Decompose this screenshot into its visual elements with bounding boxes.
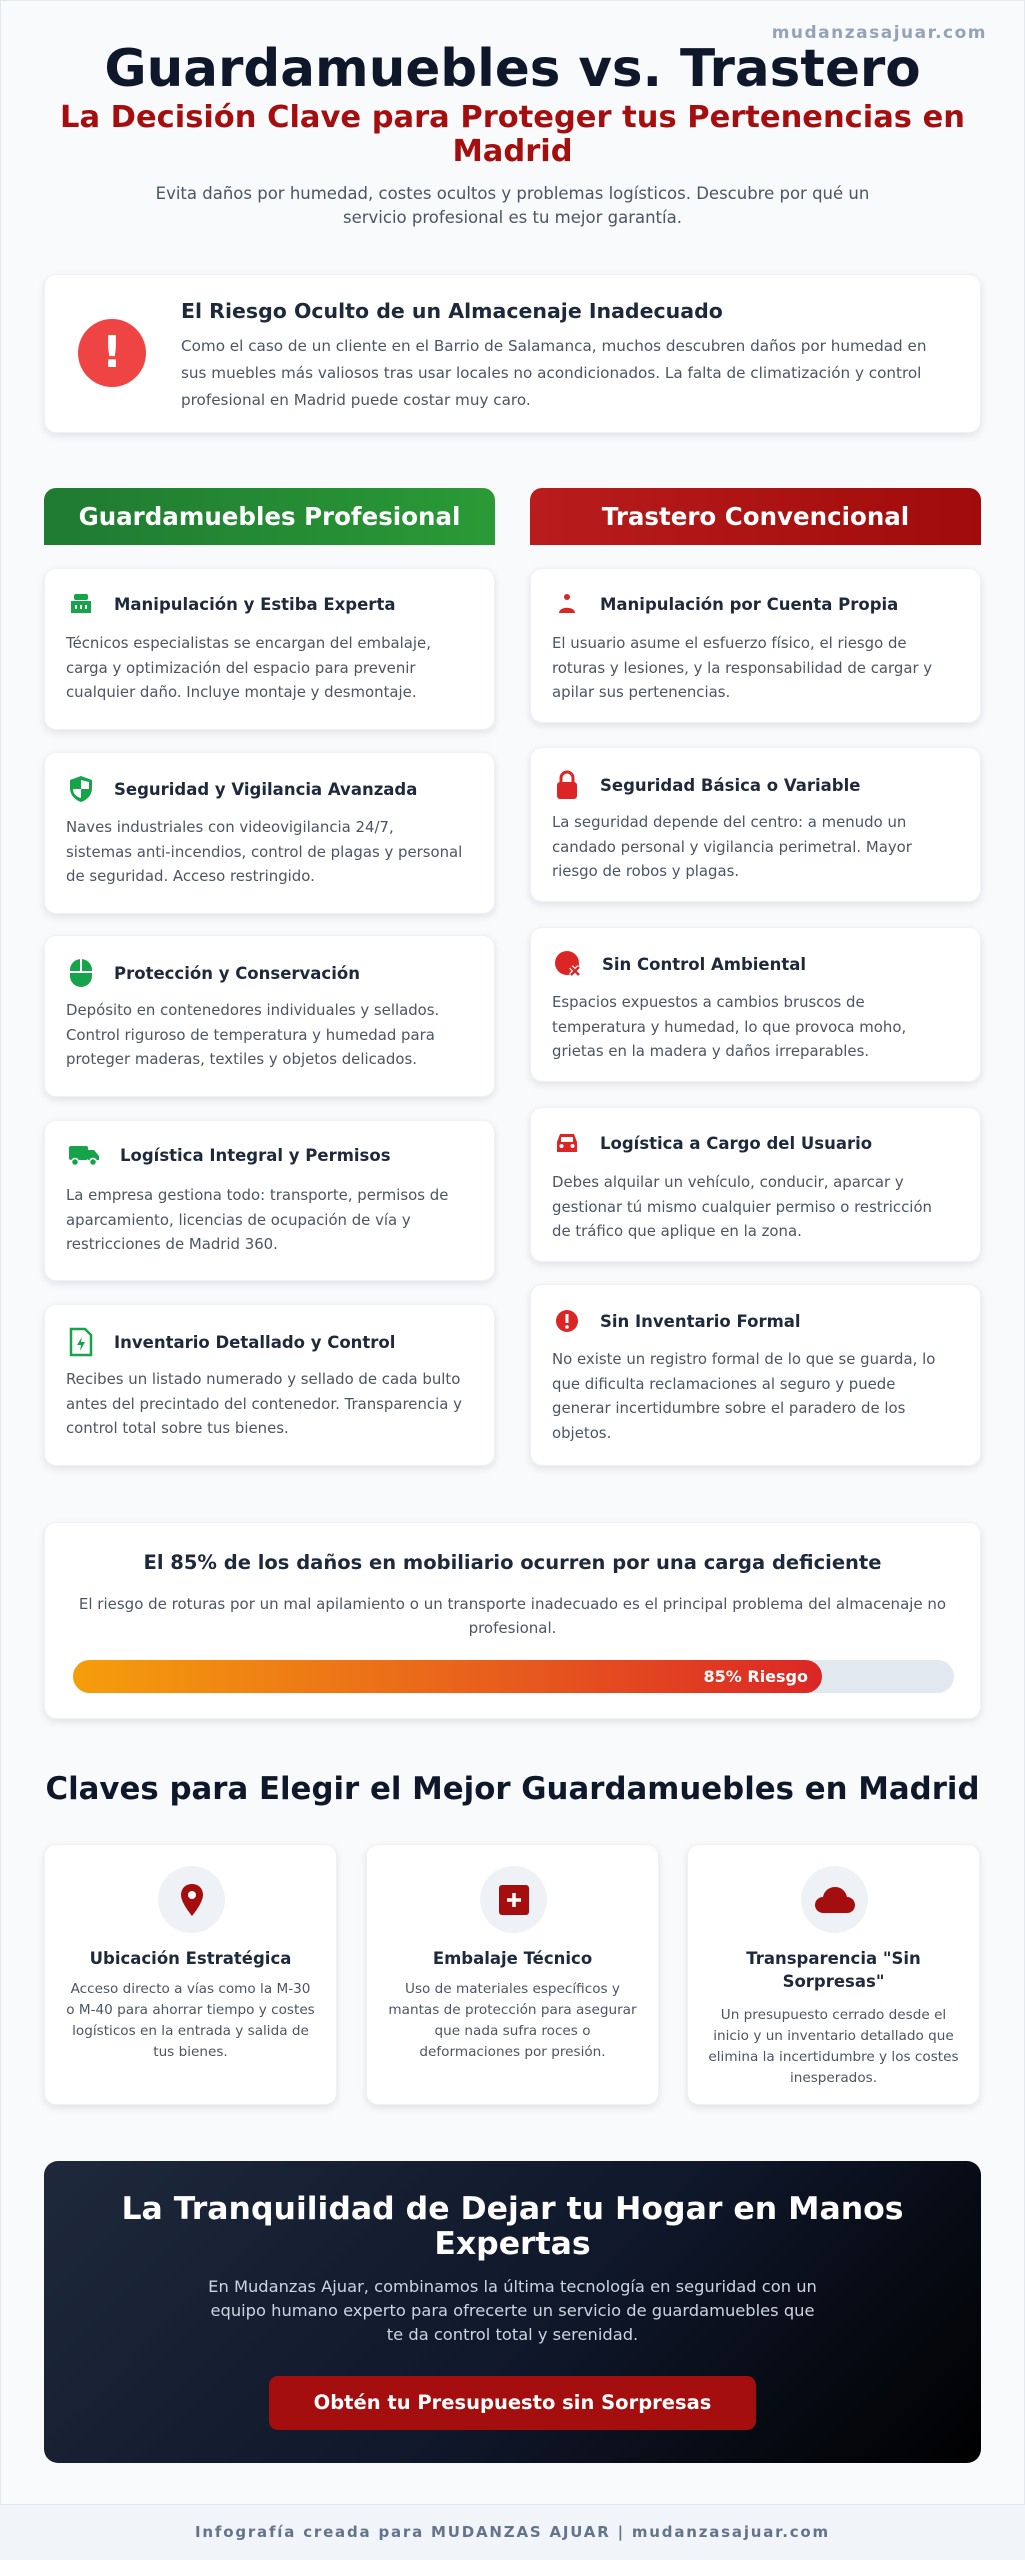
card: sin inventario: No existe un registro formal de lo que se guarda, lo que dificulta reclamaciones al seguro y puede generar incertidumbre sobre el paradero de los objetos. [552,1350,935,1442]
subtitle: La Decisión Clave para Proteger tus Pertenencias en Madrid [60,100,965,169]
card: logística usuario: Logística a Cargo del Usuario [600,1134,872,1152]
card: protección [44,935,495,1097]
card: sin inventario [530,1284,981,1466]
card: inventario detallado: Recibes un listado numerado y sellado de cada bulto [66,1370,460,1388]
key card: transparencia: Transparencia "Sin Sorpresas" [746,1949,921,1991]
card: logística integral [44,1120,495,1281]
CTA button: Obtén tu Presupuesto sin Sorpresas [314,2391,711,2414]
key card: ubicación [44,1844,337,2105]
card: seguridad avanzada: Naves industriales con videovigilancia 24/7, [66,818,394,836]
card: manipulación propia: El usuario asume el esfuerzo físico, el riesgo de roturas y lesiones, y la responsabilidad de cargar y apilar sus pertenencias. [552,634,932,701]
card: sin inventario: Sin Inventario Formal [600,1312,801,1330]
key card: ubicación: Acceso directo a vías como la M-30 [71,1981,310,1997]
card: sin control ambiental: Sin Control Ambiental [602,954,806,974]
card: sin control ambiental: Espacios expuestos a cambios bruscos de temperatura y humedad, lo que provoca moho, grietas en la madera y daños irreparables. [552,993,906,1060]
heading: conventional column: Trastero Convencional [602,502,909,531]
card: logística usuario [530,1107,981,1262]
card: logística usuario: Debes alquilar un vehículo, conducir, aparcar y gestionar tú mismo cualquier permiso o restricción de tráfico que aplique en la zona. [552,1173,932,1240]
CTA button [269,2376,756,2430]
key card: ubicación: tus bienes. [153,2044,228,2060]
card: manipulación propia: Manipulación por Cuenta Propia [600,594,898,614]
key card: embalaje: Uso de materiales específicos y mantas de protección para asegurar que nada sufra roces o deformaciones por presión. [388,1981,637,2060]
card: seguridad avanzada [44,752,495,914]
card: seguridad avanzada: sistemas anti-incendios, control de plagas y personal [66,842,462,860]
progress bar: 85% Riesgo [704,1667,808,1686]
panel: call to action [44,2161,981,2463]
card: inventario detallado: Inventario Detallado y Control [114,1332,395,1352]
heading: professional column [44,488,495,545]
key card: ubicación: logísticos en la entrada y salida de [72,2023,309,2039]
icon: warning: ! [102,327,122,378]
key card: ubicación: Ubicación Estratégica [90,1949,291,1968]
intro text: Evita daños por humedad, costes ocultos y problemas logísticos. Descubre por qué un servicio profesional es tu mejor garantía. [156,184,869,227]
card: seguridad básica: Seguridad Básica o Variable [600,776,860,794]
footer: Infografía creada para MUDANZAS AJUAR | mudanzasajuar.com [195,2523,830,2541]
stat text: El riesgo de roturas por un mal apilamiento o un transporte inadecuado es el principal problema del almacenaje no profesional. [79,1595,946,1637]
footer [0,2504,1025,2560]
card: manipulación experta: Manipulación y Estiba Experta [114,594,395,614]
card: protección: Protección y Conservación [114,964,360,982]
card: logística integral: Logística Integral y Permisos [120,1146,391,1164]
panel: hidden risk alert [44,274,981,433]
alert heading: El Riesgo Oculto de un Almacenaje Inadecuado [181,299,723,323]
card: seguridad avanzada: de seguridad. Acceso restringido. [66,867,315,885]
icon: warning [78,319,146,387]
panel: statistic [44,1522,981,1719]
heading: conventional column [530,488,981,545]
stat heading: El 85% de los daños en mobiliario ocurren por una carga deficiente [144,1551,881,1574]
key card: embalaje [366,1844,659,2105]
card: manipulación experta [44,568,495,730]
card: seguridad básica: La seguridad depende del centro: a menudo un candado personal y vigilancia perimetral. Mayor riesgo de robos y plagas. [552,813,912,880]
heading: keys: Claves para Elegir el Mejor Guardamuebles en Madrid [45,1771,980,1807]
heading: professional column: Guardamuebles Profesional [79,502,460,531]
card: inventario detallado: antes del precintado del contenedor. Transparencia y [66,1394,462,1412]
CTA heading: La Tranquilidad de Dejar tu Hogar en Manos Expertas [121,2191,904,2262]
key card: ubicación: o M-40 para ahorrar tiempo y costes [66,2002,315,2018]
card: logística integral: La empresa gestiona todo: transporte, permisos de aparcamiento, licencias de ocupación de vía y restricciones de Madrid 360. [66,1186,448,1253]
card: seguridad avanzada: Seguridad y Vigilancia Avanzada [114,780,417,798]
progress bar [73,1660,954,1693]
card: manipulación propia [530,568,981,723]
title: Guardamuebles vs. Trastero [104,39,921,99]
site label: mudanzasajuar.com [772,23,987,43]
alert text: Como el caso de un cliente en el Barrio de Salamanca, muchos descubren daños por humedad en sus muebles más valiosos tras usar locales no acondicionados. La falta de climatización y control profesional en Madrid puede costar muy caro. [181,337,926,409]
key card: transparencia: Un presupuesto cerrado desde el inicio y un inventario detallado que elimina la incertidumbre y los costes inesperados. [708,2007,959,2086]
card: inventario detallado: control total sobre tus bienes. [66,1419,289,1437]
card: inventario detallado [44,1304,495,1466]
card: protección: Depósito en contenedores individuales y sellados. Control riguroso de temperatura y humedad para proteger maderas, textiles y objetos delicados. [66,1001,439,1068]
card: manipulación experta: Técnicos especialistas se encargan del embalaje, carga y optimización del espacio para prevenir cualquier daño. Incluye montaje y desmontaje. [66,634,431,701]
key card: embalaje: Embalaje Técnico [433,1949,592,1968]
card: sin control ambiental [530,927,981,1082]
card: seguridad básica [530,747,981,902]
key card: transparencia [687,1844,980,2105]
CTA text: En Mudanzas Ajuar, combinamos la última tecnología en seguridad con un equipo humano experto para ofrecerte un servicio de guardamuebles que te da control total y serenidad. [208,2277,817,2344]
